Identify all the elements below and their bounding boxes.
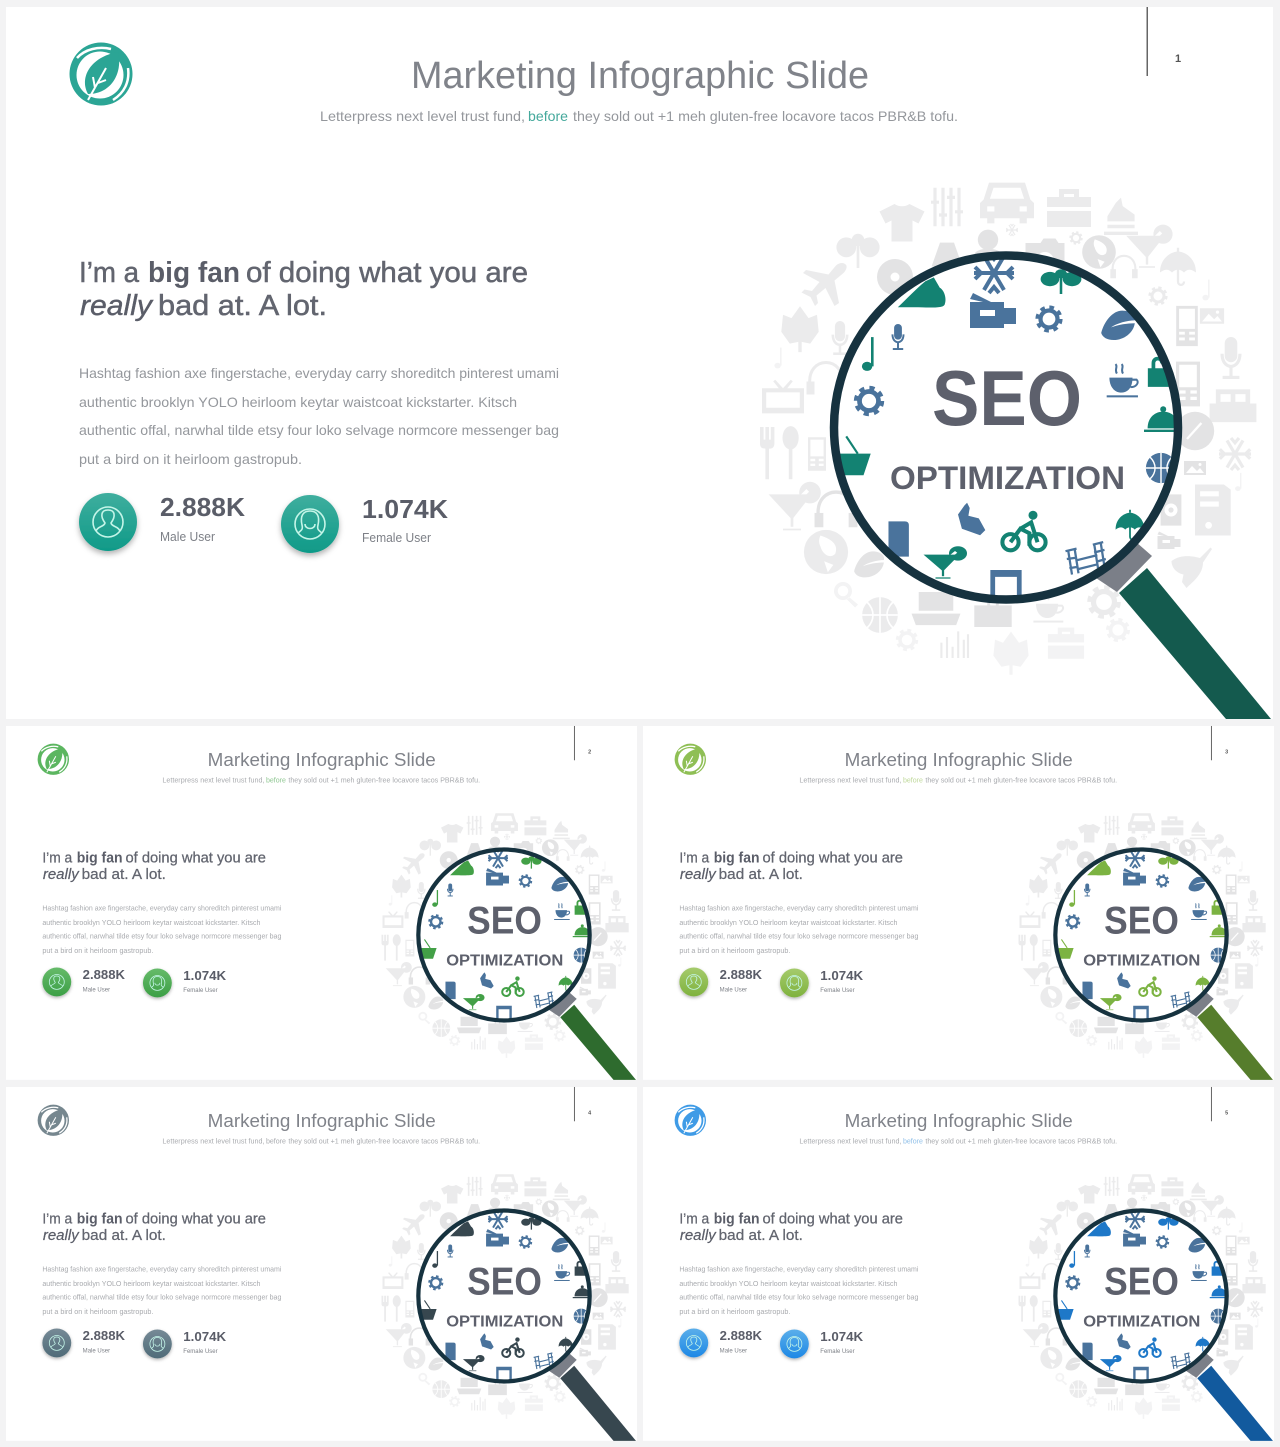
stat: male user: Male User bbox=[720, 986, 748, 993]
SEO text: SEO bbox=[467, 900, 542, 943]
heading: of doing what you are bbox=[246, 257, 528, 289]
magnifier collar bbox=[1186, 992, 1214, 1017]
OPTIMIZATION text: OPTIMIZATION bbox=[1083, 953, 1200, 970]
heading bbox=[42, 851, 266, 883]
heading: really bbox=[680, 867, 717, 883]
lens ring bbox=[834, 256, 1178, 600]
grey icon cloud bbox=[381, 813, 629, 1058]
stat: female user: 1.074K bbox=[820, 968, 864, 983]
subtitle: Letterpress next level trust fund, bbox=[799, 1139, 902, 1146]
stat: female user bbox=[281, 494, 448, 553]
heading: really bbox=[43, 867, 80, 883]
lens ring bbox=[1055, 1210, 1227, 1381]
lens icons bbox=[1056, 1209, 1228, 1382]
heading bbox=[679, 851, 903, 883]
stat: female user: Female User bbox=[820, 987, 855, 994]
lens ring bbox=[418, 849, 590, 1020]
heading: big fan bbox=[77, 851, 123, 867]
subtitle: before bbox=[528, 108, 568, 124]
stat: male user: 2.888K bbox=[83, 967, 126, 982]
body text: authentic brooklyn YOLO heirloom keytar waistcoat kickstarter. Kitsch bbox=[679, 920, 898, 927]
stat: female user: Female User bbox=[183, 1348, 218, 1355]
lens icons bbox=[419, 1209, 591, 1382]
magnifier handle bbox=[560, 1366, 636, 1441]
page number: 2 bbox=[588, 749, 591, 755]
subtitle: before bbox=[903, 778, 923, 785]
subtitle: they sold out +1 meh gluten-free locavore tacos PBR&B tofu. bbox=[925, 1139, 1117, 1146]
body text: authentic offal, narwhal tilde etsy four loko selvage normcore messenger bag bbox=[42, 934, 282, 941]
SEO text: SEO bbox=[1104, 1261, 1179, 1304]
stat: male user bbox=[679, 967, 763, 996]
magnifier lens bbox=[418, 1209, 591, 1382]
magnifier collar bbox=[549, 1353, 577, 1378]
grey icon cloud bbox=[1018, 1174, 1266, 1419]
title: Marketing Infographic Slide bbox=[208, 750, 436, 771]
body text bbox=[79, 365, 559, 467]
heading: of doing what you are bbox=[763, 1212, 903, 1228]
body text: put a bird on it heirloom gastropub. bbox=[42, 948, 153, 955]
magnifier collar bbox=[1096, 542, 1152, 592]
SEO text: SEO bbox=[932, 354, 1082, 442]
heading: really bbox=[80, 290, 154, 322]
grey icon cloud bbox=[760, 183, 1256, 675]
SEO text: SEO bbox=[1104, 900, 1179, 943]
body text: authentic offal, narwhal tilde etsy four loko selvage normcore messenger bag bbox=[42, 1295, 282, 1302]
heading: big fan bbox=[714, 851, 760, 867]
magnifier handle bbox=[1197, 1005, 1273, 1080]
subtitle: they sold out +1 meh gluten-free locavore tacos PBR&B tofu. bbox=[288, 1139, 480, 1146]
body text: put a bird on it heirloom gastropub. bbox=[42, 1309, 153, 1316]
body text: Hashtag fashion axe fingerstache, everyday carry shoreditch pinterest umami bbox=[679, 905, 919, 912]
subtitle: before bbox=[266, 1139, 286, 1146]
magnifier collar bbox=[549, 992, 577, 1017]
body text: Hashtag fashion axe fingerstache, everyday carry shoreditch pinterest umami bbox=[42, 905, 282, 912]
grey icon cloud bbox=[1018, 813, 1266, 1058]
magnifier handle bbox=[1119, 568, 1271, 719]
subtitle: before bbox=[903, 1139, 923, 1146]
OPTIMIZATION text: OPTIMIZATION bbox=[446, 953, 563, 970]
heading: bad at. A lot. bbox=[82, 867, 166, 883]
magnifier lens bbox=[1055, 1209, 1228, 1382]
magnifier collar bbox=[1186, 1353, 1214, 1378]
stat: male user: Male User bbox=[160, 529, 216, 544]
slide background bbox=[6, 726, 637, 1080]
heading: I’m a bbox=[42, 851, 73, 867]
OPTIMIZATION text: OPTIMIZATION bbox=[446, 1314, 563, 1331]
heading: I’m a bbox=[679, 1212, 710, 1228]
stat: female user: 1.074K bbox=[183, 968, 227, 983]
heading bbox=[679, 1212, 903, 1244]
heading: really bbox=[43, 1228, 80, 1244]
stat: male user: 2.888K bbox=[720, 1328, 763, 1343]
page number: 3 bbox=[1225, 749, 1228, 755]
lens icons bbox=[419, 848, 591, 1021]
body text: authentic brooklyn YOLO heirloom keytar waistcoat kickstarter. Kitsch bbox=[679, 1281, 898, 1288]
heading: I’m a bbox=[679, 851, 710, 867]
slide background bbox=[6, 1087, 637, 1441]
stat: female user: 1.074K bbox=[362, 494, 448, 524]
stat: female user: 1.074K bbox=[820, 1329, 864, 1344]
stat: male user: Male User bbox=[83, 986, 111, 993]
body text: Hashtag fashion axe fingerstache, everyday carry shoreditch pinterest umami bbox=[42, 1266, 282, 1273]
title: Marketing Infographic Slide bbox=[208, 1111, 436, 1132]
panel: slide 3 lime bbox=[643, 726, 1274, 1080]
panel: slide 5 blue bbox=[643, 1087, 1274, 1441]
subtitle bbox=[162, 1139, 480, 1146]
page number: 1 bbox=[1175, 53, 1181, 65]
stat: female user: Female User bbox=[183, 987, 218, 994]
magnifier lens bbox=[1055, 848, 1228, 1021]
heading: bad at. A lot. bbox=[719, 867, 803, 883]
body text: authentic brooklyn YOLO heirloom keytar waistcoat kickstarter. Kitsch bbox=[42, 1281, 261, 1288]
subtitle: Letterpress next level trust fund, bbox=[162, 1139, 265, 1146]
heading: of doing what you are bbox=[126, 1212, 266, 1228]
logo bbox=[38, 1105, 69, 1136]
stat: male user bbox=[42, 1328, 126, 1357]
heading: big fan bbox=[714, 1212, 760, 1228]
stat: male user: 2.888K bbox=[83, 1328, 126, 1343]
panel: slide 2 green bbox=[6, 726, 637, 1080]
subtitle bbox=[162, 778, 480, 785]
logo bbox=[675, 1105, 706, 1136]
page number bbox=[1211, 1087, 1228, 1121]
heading: of doing what you are bbox=[763, 851, 903, 867]
lens icons bbox=[835, 253, 1181, 600]
subtitle: Letterpress next level trust fund, bbox=[799, 778, 902, 785]
SEO text: SEO bbox=[467, 1261, 542, 1304]
stat: female user: Female User bbox=[362, 530, 432, 545]
body text bbox=[679, 905, 919, 955]
stat: male user bbox=[79, 492, 245, 551]
heading bbox=[79, 257, 528, 322]
subtitle: Letterpress next level trust fund, bbox=[162, 778, 265, 785]
body text: authentic offal, narwhal tilde etsy four loko selvage normcore messenger bag bbox=[679, 934, 919, 941]
stat: female user bbox=[780, 968, 864, 997]
heading: bad at. A lot. bbox=[82, 1228, 166, 1244]
subtitle: they sold out +1 meh gluten-free locavore tacos PBR&B tofu. bbox=[925, 778, 1117, 785]
logo bbox=[38, 744, 69, 775]
subtitle: before bbox=[266, 778, 286, 785]
heading: I’m a bbox=[42, 1212, 73, 1228]
title: Marketing Infographic Slide bbox=[845, 750, 1073, 771]
heading: big fan bbox=[77, 1212, 123, 1228]
stat: male user bbox=[42, 967, 126, 996]
stat: female user: Female User bbox=[820, 1348, 855, 1355]
OPTIMIZATION text: OPTIMIZATION bbox=[1083, 1314, 1200, 1331]
body text bbox=[42, 1266, 282, 1316]
stat: male user: 2.888K bbox=[160, 492, 245, 522]
stat: female user bbox=[143, 1329, 227, 1358]
stat: male user: Male User bbox=[720, 1347, 748, 1354]
page number bbox=[1211, 726, 1228, 760]
subtitle bbox=[799, 778, 1117, 785]
stat: female user bbox=[780, 1329, 864, 1358]
body text bbox=[679, 1266, 919, 1316]
heading: really bbox=[680, 1228, 717, 1244]
slide background bbox=[643, 726, 1274, 1080]
grey icon cloud bbox=[381, 1174, 629, 1419]
stat: male user: 2.888K bbox=[720, 967, 763, 982]
stat: female user: 1.074K bbox=[183, 1329, 227, 1344]
page number: 5 bbox=[1225, 1110, 1228, 1116]
body text: Hashtag fashion axe fingerstache, everyday carry shoreditch pinterest umami bbox=[679, 1266, 919, 1273]
magnifier lens bbox=[418, 848, 591, 1021]
heading: I’m a bbox=[79, 257, 140, 289]
magnifier lens bbox=[834, 253, 1181, 600]
body text: authentic brooklyn YOLO heirloom keytar waistcoat kickstarter. Kitsch bbox=[42, 920, 261, 927]
heading: bad at. A lot. bbox=[719, 1228, 803, 1244]
page number bbox=[1146, 7, 1181, 76]
title: Marketing Infographic Slide bbox=[845, 1111, 1073, 1132]
body text: authentic offal, narwhal tilde etsy four loko selvage normcore messenger bag bbox=[79, 422, 559, 438]
body text: put a bird on it heirloom gastropub. bbox=[679, 1309, 790, 1316]
stat: male user bbox=[679, 1328, 763, 1357]
subtitle bbox=[799, 1139, 1117, 1146]
body text: Hashtag fashion axe fingerstache, everyday carry shoreditch pinterest umami bbox=[79, 365, 559, 381]
logo bbox=[70, 42, 132, 106]
heading: big fan bbox=[148, 257, 240, 289]
page number bbox=[574, 1087, 592, 1121]
lens ring bbox=[1055, 849, 1227, 1020]
panel: slide 4 slate bbox=[6, 1087, 637, 1441]
panel: slide 1 large teal bbox=[6, 7, 1273, 719]
logo bbox=[675, 744, 706, 775]
heading bbox=[42, 1212, 266, 1244]
title: Marketing Infographic Slide bbox=[411, 55, 869, 97]
OPTIMIZATION text: OPTIMIZATION bbox=[890, 460, 1125, 496]
heading: bad at. A lot. bbox=[158, 290, 327, 322]
magnifier handle bbox=[1197, 1366, 1273, 1441]
subtitle bbox=[320, 108, 958, 124]
magnifier handle bbox=[560, 1005, 636, 1080]
subtitle: Letterpress next level trust fund, bbox=[320, 108, 525, 124]
page number bbox=[574, 726, 591, 760]
subtitle: they sold out +1 meh gluten-free locavore tacos PBR&B tofu. bbox=[288, 778, 480, 785]
lens ring bbox=[418, 1210, 590, 1381]
body text: authentic offal, narwhal tilde etsy four loko selvage normcore messenger bag bbox=[679, 1295, 919, 1302]
page number: 4 bbox=[588, 1110, 592, 1116]
slide background bbox=[6, 7, 1273, 719]
body text bbox=[42, 905, 282, 955]
slide background bbox=[643, 1087, 1274, 1441]
heading: of doing what you are bbox=[126, 851, 266, 867]
body text: authentic brooklyn YOLO heirloom keytar waistcoat kickstarter. Kitsch bbox=[79, 394, 517, 410]
subtitle: they sold out +1 meh gluten-free locavore tacos PBR&B tofu. bbox=[573, 108, 958, 124]
body text: put a bird on it heirloom gastropub. bbox=[679, 948, 790, 955]
body text: put a bird on it heirloom gastropub. bbox=[79, 451, 302, 467]
lens icons bbox=[1056, 848, 1228, 1021]
stat: female user bbox=[143, 968, 227, 997]
stat: male user: Male User bbox=[83, 1347, 111, 1354]
